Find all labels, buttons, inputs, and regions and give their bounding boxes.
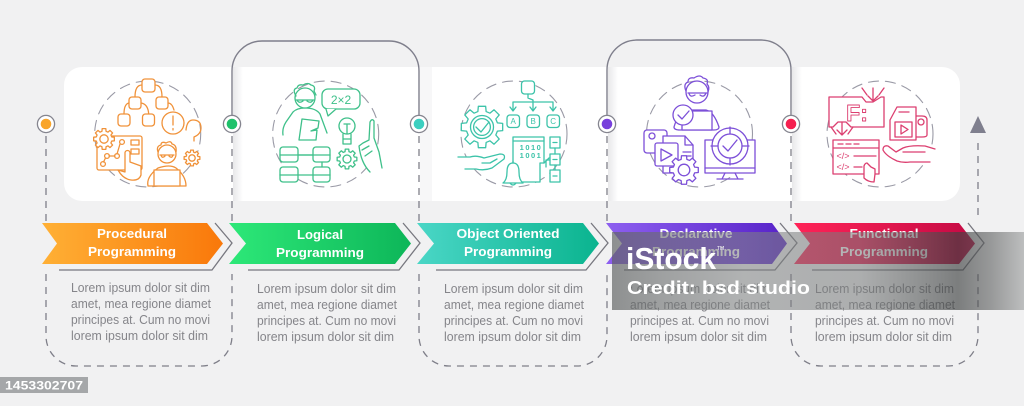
text block 4: Lorem ipsum dolor sit dim	[630, 282, 769, 296]
arrow block 3: object oriented programming	[417, 223, 608, 270]
icon: logical programming	[273, 81, 382, 187]
icon: object oriented programming: C	[550, 117, 556, 126]
icon: object oriented programming	[458, 81, 567, 187]
icon: procedural programming	[94, 79, 201, 187]
panel: icon strip	[64, 67, 960, 201]
icon: functional programming: </>	[836, 151, 850, 161]
text block 3	[444, 282, 585, 344]
text block 5: principes at. Cum no movi	[815, 314, 954, 328]
text block 3: lorem ipsum dolor sit dim	[444, 330, 581, 344]
text block 4: amet, mea regione diamet	[630, 298, 771, 312]
text block 2: lorem ipsum dolor sit dim	[257, 330, 394, 344]
text block 5: amet, mea regione diamet	[815, 298, 956, 312]
text block 1	[71, 281, 212, 343]
watermark band: iStock	[626, 241, 717, 276]
text block 4: lorem ipsum dolor sit dim	[630, 330, 767, 344]
arrow block 3: object oriented programming: Programming	[464, 244, 552, 259]
arrow block 4: declarative programming: Programming	[652, 244, 740, 259]
connector arcs	[232, 40, 791, 124]
text block 1: lorem ipsum dolor sit dim	[71, 329, 208, 343]
watermark band	[612, 232, 1024, 310]
icon: declarative programming	[644, 76, 755, 187]
text block 5: Lorem ipsum dolor sit dim	[815, 282, 954, 296]
node 4	[598, 115, 616, 133]
arrow block 4: declarative programming: Declarative	[660, 226, 732, 241]
text block 3: principes at. Cum no movi	[444, 314, 583, 328]
icon: logical programming: 2×2	[331, 93, 352, 107]
arrow head	[970, 116, 986, 133]
arrow block 4: declarative programming	[606, 223, 797, 270]
arrow block 2: logical programming: Programming	[276, 245, 364, 260]
node 5	[782, 115, 800, 133]
text block 1: amet, mea regione diamet	[71, 297, 212, 311]
text block 4: principes at. Cum no movi	[630, 314, 769, 328]
arrow block 3: object oriented programming: Object Oriented	[456, 226, 560, 241]
watermark band: Credit: bsd studio	[627, 278, 810, 298]
icon: functional programming: F:	[846, 100, 868, 126]
node 3	[410, 115, 428, 133]
watermark band: TM	[717, 246, 724, 252]
arrow block 1: procedural programming: Procedural	[97, 226, 167, 241]
arrow block 5: functional programming	[794, 223, 984, 270]
text block 3: amet, mea regione diamet	[444, 298, 585, 312]
image id label: 1453302707	[5, 378, 83, 392]
arrow block 2: logical programming	[229, 223, 420, 270]
text block 5: lorem ipsum dolor sit dim	[815, 330, 952, 344]
arrow block 2: logical programming: Logical	[297, 227, 343, 242]
icon: object oriented programming: B	[531, 117, 536, 126]
text block 3: Lorem ipsum dolor sit dim	[444, 282, 583, 296]
text block 2: amet, mea regione diamet	[257, 298, 398, 312]
node 1	[37, 115, 55, 133]
arrow block 5: functional programming: Programming	[840, 244, 928, 259]
icon: object oriented programming: A	[511, 117, 517, 126]
text block 2	[257, 282, 398, 344]
arrow block 1: procedural programming: Programming	[88, 244, 176, 259]
image id label	[0, 377, 88, 393]
icon: functional programming: </>	[836, 162, 850, 172]
text block 1: principes at. Cum no movi	[71, 313, 210, 327]
node 2	[223, 115, 241, 133]
icon: functional programming	[827, 81, 935, 187]
icon: object oriented programming: 1001	[520, 151, 542, 160]
arrow block 1: procedural programming	[42, 223, 232, 270]
dashed connectors	[46, 136, 978, 366]
icon: object oriented programming: 1010	[520, 143, 542, 152]
text block 1: Lorem ipsum dolor sit dim	[71, 281, 210, 295]
text block 4	[630, 282, 771, 344]
text block 2: principes at. Cum no movi	[257, 314, 396, 328]
text block 5	[815, 282, 956, 344]
text block 2: Lorem ipsum dolor sit dim	[257, 282, 396, 296]
arrow block 5: functional programming: Functional	[850, 226, 918, 241]
